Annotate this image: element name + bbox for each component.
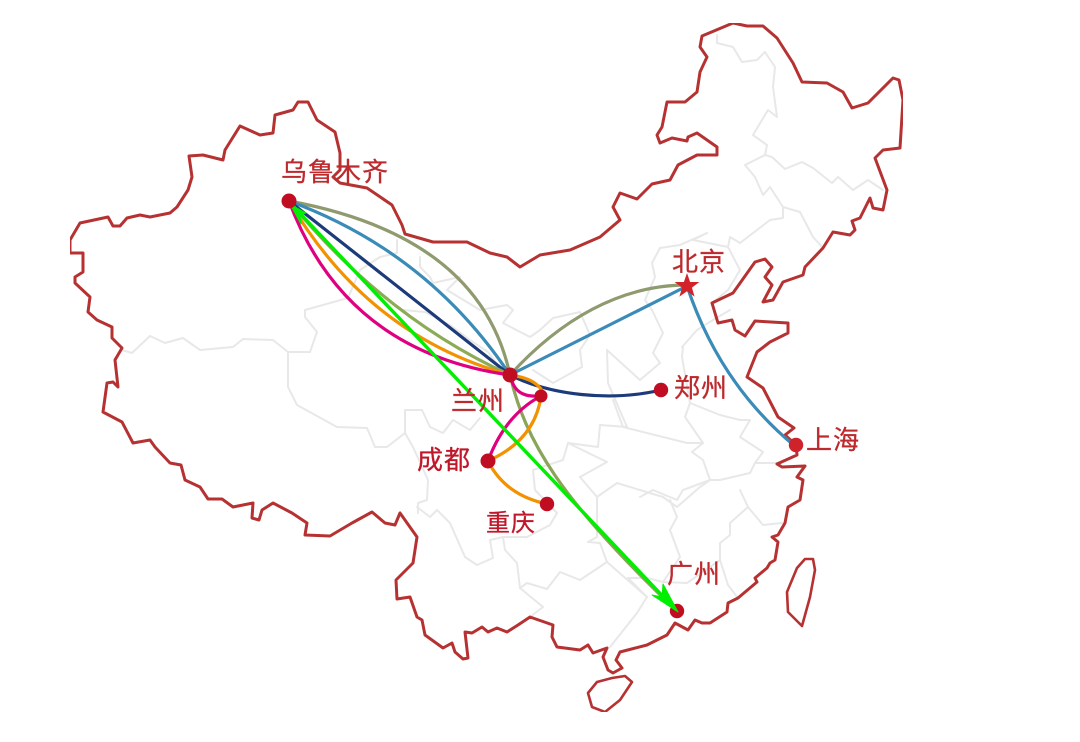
- label: Urumqi: 乌鲁木齐: [281, 157, 389, 187]
- province boundaries: [122, 35, 883, 647]
- label: Chengdu: 成都: [417, 445, 471, 475]
- city marker: Chengdu: [480, 454, 496, 468]
- city marker: Urumqi: [282, 194, 296, 208]
- route: Beijing to Shanghai: [687, 286, 796, 447]
- city marker: Zhengzhou: [654, 383, 668, 397]
- routes: Lanzhou, Chengdu and Chongqing links: [488, 375, 547, 504]
- Hainan island: [588, 676, 632, 712]
- map and routes: [70, 23, 903, 712]
- label: Lanzhou: 兰州: [451, 386, 505, 416]
- city marker: Shanghai: [789, 438, 803, 452]
- label: Zhengzhou: 郑州: [674, 373, 728, 403]
- city marker: Guangzhou: [670, 604, 684, 618]
- national border outline: [70, 23, 903, 673]
- city marker: intermediate stop: [534, 390, 548, 402]
- routes: Urumqi to Lanzhou: [289, 201, 510, 375]
- label: Chongqing: 重庆: [486, 510, 536, 537]
- label: Beijing: 北京: [672, 247, 726, 277]
- route: Urumqi to Guangzhou green arrow: [290, 204, 678, 612]
- icon: Beijing star: [675, 273, 699, 297]
- city marker: Chongqing: [540, 497, 554, 511]
- city marker: Lanzhou: [502, 368, 518, 382]
- routes: Lanzhou to Beijing, Zhengzhou and Guangzhou: [510, 285, 687, 611]
- label: Shanghai: 上海: [806, 425, 860, 455]
- Taiwan island: [787, 559, 815, 626]
- label: Guangzhou: 广州: [667, 559, 721, 589]
